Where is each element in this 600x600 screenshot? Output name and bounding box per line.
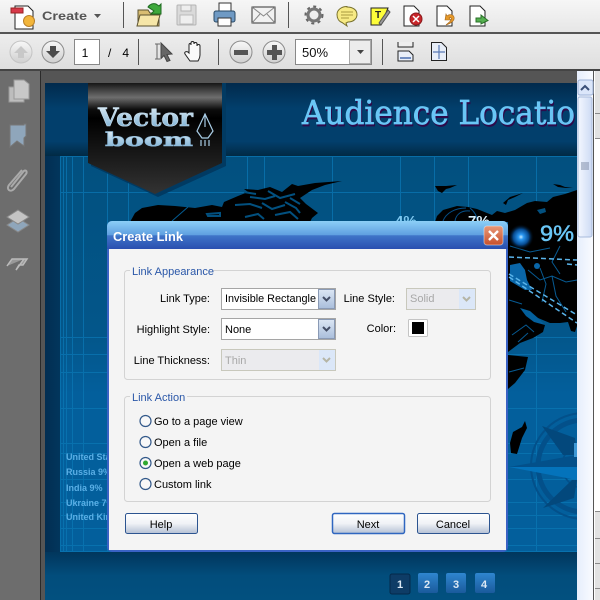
button: help: [126, 514, 198, 534]
glowing location dot: [508, 224, 534, 250]
label: link type: Link Type:: [160, 293, 210, 305]
button: next page: [42, 41, 64, 63]
button: cancel: Cancel: [436, 519, 470, 531]
audience list text: Russia 9%: [66, 467, 111, 477]
header band: [45, 83, 577, 156]
scroll thumb: [578, 97, 592, 237]
select: highlight style: [222, 318, 336, 340]
select: line thickness: Thin: [225, 355, 246, 367]
icon: selection cursor: [155, 43, 172, 62]
color swatch: [408, 320, 428, 336]
page buttons: [390, 573, 495, 594]
radio: open a file: Open a file: [154, 437, 207, 449]
dialog body: [109, 249, 506, 550]
page buttons: 2: [424, 579, 430, 591]
map grid: [60, 156, 577, 552]
icon: signature: [7, 259, 27, 270]
create menu label: Create: [42, 11, 87, 23]
icon: printer: [214, 3, 235, 26]
icon: document reply: [437, 6, 454, 26]
partial percentages behind dialog: [395, 213, 490, 230]
logo text: [97, 103, 194, 151]
icon: layers: [7, 210, 29, 232]
radio: custom link: Custom link: [154, 479, 212, 491]
icon: save disk: [177, 5, 196, 25]
icon: mail envelope: [252, 7, 275, 23]
audience list text: United States: [66, 452, 124, 462]
scrollbar: [577, 71, 600, 600]
zoom percent field: [296, 40, 372, 64]
logo text: Vector: [97, 103, 194, 132]
select: highlight style: None: [225, 324, 251, 336]
east africa silhouette: [508, 355, 528, 389]
select: link type: [222, 288, 336, 310]
page buttons: 1: [397, 579, 403, 591]
label: color: Color:: [367, 323, 396, 335]
icon: gear: [306, 6, 322, 24]
title bar: Create Link: [113, 230, 183, 244]
audience list text: United Kingdom: [66, 512, 136, 522]
button: help: Help: [150, 519, 172, 531]
page number field: 1: [82, 46, 89, 60]
north america silhouette: [130, 181, 342, 222]
button: next: [332, 514, 404, 534]
select: line style: Solid: [410, 293, 434, 305]
document page: [45, 83, 600, 600]
icon: bookmark: [10, 124, 26, 147]
select: line thickness: [222, 350, 336, 370]
footer band: [45, 552, 577, 600]
audience list text: [66, 452, 136, 522]
page total: / 4: [108, 46, 129, 60]
zoom percent field: 50%: [302, 45, 328, 60]
top toolbar: [0, 0, 600, 34]
eurasia silhouette: [435, 184, 577, 222]
select: line style: [406, 288, 476, 310]
select: link type: Invisible Rectangle: [225, 293, 316, 305]
label: highlight style: Highlight Style:: [137, 324, 210, 336]
icon: pen nib: [197, 114, 213, 146]
left navigation panel: [0, 71, 41, 600]
icon: pages: [9, 80, 29, 102]
label: line thickness: Line Thickness:: [134, 355, 210, 367]
button: previous page: [10, 41, 32, 63]
icon: comment bubble: [337, 6, 357, 26]
map background: [60, 156, 577, 552]
partial percentages behind dialog: 7%: [468, 213, 490, 230]
audience list text: Ukraine 7%: [66, 498, 115, 508]
title bar: [107, 221, 508, 249]
icon: fit page: [432, 42, 446, 60]
button: zoom out: [230, 41, 252, 63]
icon: document delete: [404, 6, 422, 26]
icon: dropdown arrow: [94, 14, 101, 18]
icon: document export: [470, 6, 488, 26]
partial percentages behind dialog: 4%: [395, 213, 417, 230]
map country outlines: [509, 246, 577, 372]
asia and arabia silhouette: [508, 221, 577, 352]
dialog: create link: [107, 221, 508, 552]
icon: create document: [11, 6, 34, 29]
panel: link appearance: Link Appearance: [132, 266, 214, 278]
radio: go to a page view: Go to a page view: [154, 416, 243, 428]
logo text: boom: [105, 129, 193, 151]
icon: highlighter note: [371, 8, 390, 25]
radio: open a web page: Open a web page: [154, 458, 241, 470]
icon: highlighter note: T: [375, 10, 381, 21]
icon: hand tool: [185, 42, 200, 61]
close button: [484, 226, 503, 245]
navigation toolbar: [0, 34, 600, 71]
audience list text: India 9%: [66, 483, 103, 493]
title: Audience Locatio: [302, 95, 576, 134]
button: cancel: [418, 514, 490, 534]
page buttons: 3: [453, 579, 459, 591]
flight path dashes: [509, 257, 577, 323]
label: line style: Line Style:: [344, 293, 395, 305]
button: zoom in: [263, 41, 285, 63]
scroll up button: [578, 80, 593, 95]
madagascar: [510, 421, 527, 454]
title: Audience Locatio: [301, 93, 575, 132]
icon: open folder: [137, 4, 161, 26]
panel: link appearance: [124, 264, 490, 380]
logo ribbon: [88, 83, 226, 197]
button: next: Next: [357, 519, 379, 531]
page buttons: 4: [481, 579, 488, 591]
compass rose: [509, 413, 600, 519]
panel: link action: [124, 390, 490, 502]
icon: paperclip: [8, 170, 27, 191]
9% label: 9%: [540, 221, 574, 246]
panel: link action: Link Action: [132, 392, 185, 404]
icon: fit width: [398, 42, 413, 61]
page number field: [74, 40, 100, 64]
